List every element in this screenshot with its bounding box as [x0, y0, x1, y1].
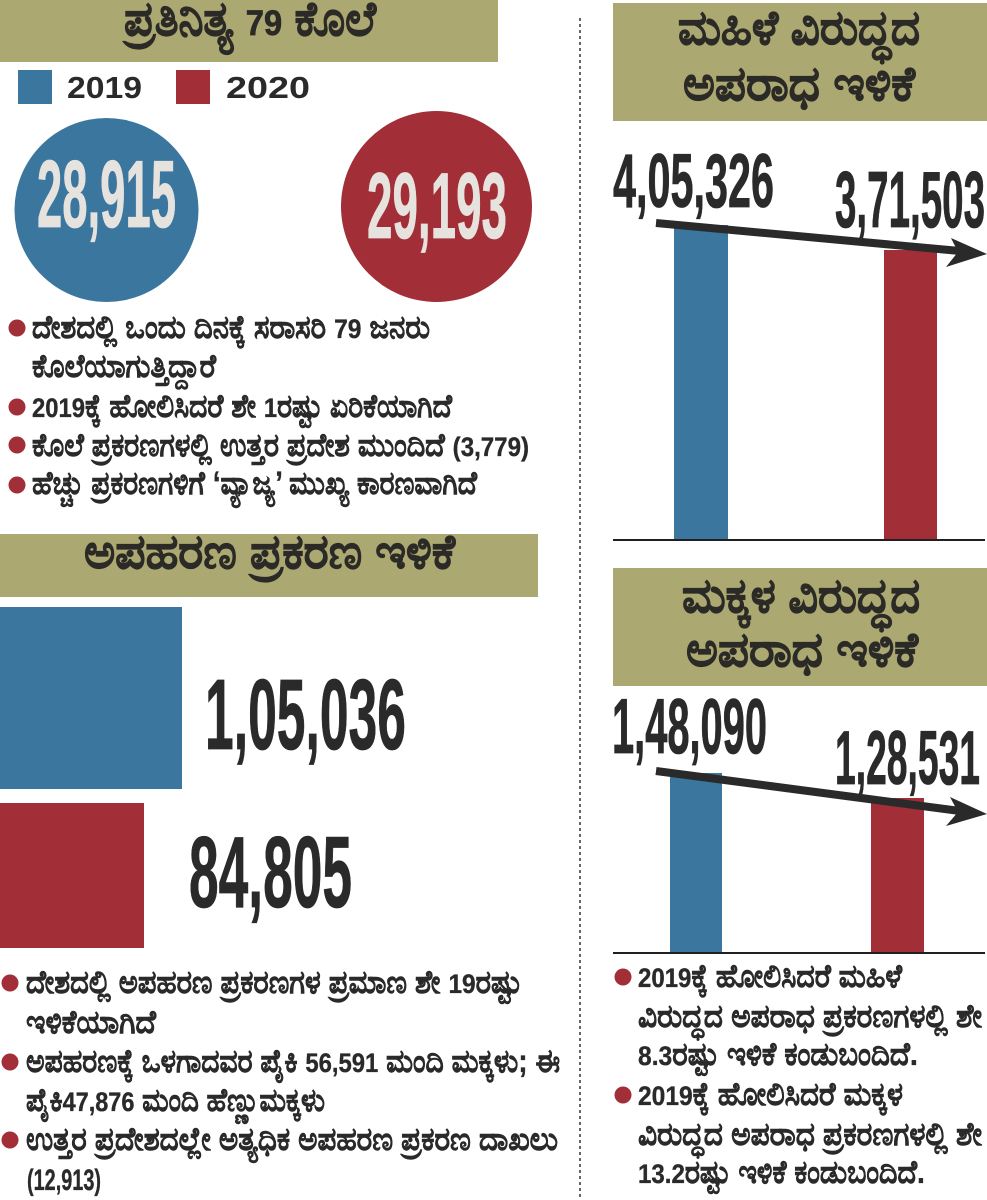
legend: 2019 — [67, 70, 142, 105]
text block: kidnapping facts: ದೇಶದಲ್ಲಿ ಅಪಹರಣ ಪ್ರಕರಣಗಳ ಪ್ರಮಾಣ ಶೇ 19ರಷ್ಟು — [26, 964, 522, 1004]
panel: murders — [0, 0, 532, 509]
circle: 2020 murders — [341, 111, 532, 302]
heading: kidnapping: ಅಪಹರಣ ಪ್ರಕರಣ ಇಳಿಕೆ — [84, 526, 456, 583]
heading: crimes against women: ಮಹಿಳೆ ವಿರುದ್ಧದ — [678, 2, 920, 64]
circle: 2019 murders — [14, 118, 198, 302]
text block: crime facts: 13.2ರಷ್ಟು ಇಳಿಕೆ ಕಂಡುಬಂದಿದೆ. — [638, 1154, 925, 1194]
text block: murder facts: 2019ಕ್ಕೆ ಹೋಲಿಸಿದರೆ ಶೇ 1ರಷ್ಟು ಏರಿಕೆಯಾಗಿದೆ — [32, 388, 453, 429]
heading: crimes against children: ಅಪರಾಧ ಇಳಿಕೆ — [686, 624, 919, 677]
circle: 2020 murders: 29,193 — [367, 153, 507, 258]
bar chart: crimes against women: 4,05,326 — [613, 139, 774, 224]
text block: kidnapping facts: (12,913) — [27, 1164, 101, 1197]
bar chart: crimes against women — [613, 139, 987, 540]
text block: crime facts: 2019ಕ್ಕೆ ಹೋಲಿಸಿದರೆ ಮಕ್ಕಳ — [638, 1076, 903, 1117]
panel: crimes against women — [613, 2, 987, 540]
panel: kidnapping — [0, 526, 560, 1197]
legend: 2020 — [226, 70, 310, 105]
text block: kidnapping facts: ಇಳಿಕೆಯಾಗಿದೆ — [26, 1004, 157, 1040]
bar: 2019 kidnapping: 1,05,036 — [205, 659, 406, 771]
text block: kidnapping facts: ಉತ್ತರ ಪ್ರದೇಶದಲ್ಲೇ ಅತ್ಯಧಿಕ ಅಪಹರಣ ಪ್ರಕರಣ ದಾಖಲು — [26, 1121, 558, 1164]
bar: 2019 kidnapping — [0, 607, 406, 789]
bar chart: crimes against children: 1,48,090 — [612, 682, 767, 770]
arrow: decline — [656, 771, 987, 826]
heading: crimes against children: ಮಕ್ಕಳ ವಿರುದ್ಧದ — [682, 570, 920, 632]
text block: crime facts: 8.3ರಷ್ಟು ಇಳಿಕೆ ಕಂಡುಬಂದಿದೆ. — [638, 1036, 918, 1076]
text block: murder facts: ಕೊಲೆಯಾಗುತ್ತಿದ್ದಾರೆ — [32, 348, 217, 390]
text block: murder facts: ದೇಶದಲ್ಲಿ ಒಂದು ದಿನಕ್ಕೆ ಸರಾಸರಿ 79 ಜನರು — [32, 309, 430, 350]
text block: kidnapping facts: ಅಪಹರಣಕ್ಕೆ ಒಳಗಾದವರ ಪೈಕಿ 56,591 ಮಂದಿ ಮಕ್ಕಳು; ಈ — [26, 1043, 560, 1084]
legend — [18, 70, 310, 105]
text block: crime facts — [614, 958, 983, 1194]
heading: crimes against women: ಅಪರಾಧ ಇಳಿಕೆ — [683, 58, 916, 111]
arrow: decline — [656, 223, 987, 267]
text block: murder facts — [8, 309, 529, 509]
circle: 2019 murders: 28,915 — [37, 141, 176, 248]
text block: kidnapping facts: ಪೈಕಿ47,876 ಮಂದಿ ಹೆಣ್ಣುಮಕ್ಕಳು — [26, 1082, 325, 1125]
text block: kidnapping facts — [2, 964, 560, 1197]
heading: crimes against women — [613, 2, 987, 121]
bar: 2020 kidnapping: 84,805 — [189, 817, 352, 929]
text block: murder facts: ಹೆಚ್ಚು ಪ್ರಕರಣಗಳಿಗೆ ‘ವ್ಯಾಜ್ಯ’ ಮುಖ್ಯ ಕಾರಣವಾಗಿದೆ — [32, 465, 478, 509]
text block: murder facts: ಕೊಲೆ ಪ್ರಕರಣಗಳಲ್ಲಿ ಉತ್ತರ ಪ್ರದೇಶ ಮುಂದಿದೆ (3,779) — [32, 427, 529, 466]
panel: crimes against children — [612, 568, 987, 1194]
heading: murders — [0, 0, 498, 62]
heading: crimes against children — [613, 568, 987, 686]
bar: 2020 kidnapping — [0, 803, 352, 948]
text block: crime facts: 2019ಕ್ಕೆ ಹೋಲಿಸಿದರೆ ಮಹಿಳೆ — [638, 958, 903, 999]
heading: kidnapping — [0, 526, 538, 597]
bar chart: crimes against children — [612, 682, 987, 953]
